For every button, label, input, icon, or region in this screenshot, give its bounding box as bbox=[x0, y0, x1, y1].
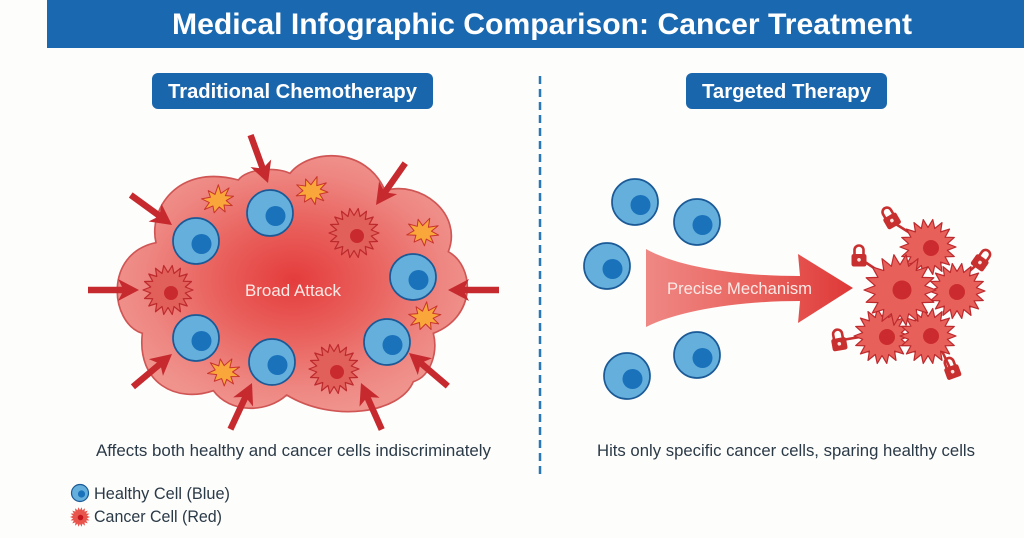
caption: chemotherapy: Affects both healthy and cancer cells indiscriminately bbox=[96, 442, 492, 460]
lock connectors bbox=[842, 221, 980, 368]
heading: Targeted Therapy bbox=[686, 73, 887, 109]
legend icon: cancer cell bbox=[70, 507, 90, 527]
legend icon: healthy cell bbox=[72, 484, 88, 502]
legend label: healthy: Healthy Cell (Blue) bbox=[94, 485, 230, 503]
padlocks on cancer cells bbox=[829, 204, 994, 381]
heading: Targeted Therapy: Targeted Therapy bbox=[702, 81, 872, 103]
caption: targeted therapy: Hits only specific cancer cells, sparing healthy cells bbox=[597, 442, 975, 460]
heading: Traditional Chemotherapy: Traditional Chemotherapy bbox=[168, 81, 418, 103]
damage bursts bbox=[200, 174, 442, 390]
arrow: precise mechanism bbox=[646, 249, 853, 327]
panel: chemotherapy broad attack bbox=[88, 131, 499, 434]
attack arrows bbox=[88, 131, 499, 434]
spared healthy cells bbox=[584, 179, 720, 399]
targeted cancer cell cluster bbox=[854, 220, 985, 363]
heading: Traditional Chemotherapy bbox=[152, 73, 433, 109]
legend bbox=[70, 484, 230, 527]
arrow: precise mechanism: Precise Mechanism bbox=[667, 279, 812, 298]
panel: targeted therapy bbox=[584, 179, 994, 399]
title: Medical Infographic Comparison: Cancer Treatment bbox=[172, 8, 912, 41]
cancer cells under attack bbox=[143, 208, 379, 394]
label: Broad Attack: Broad Attack bbox=[245, 281, 342, 300]
healthy cells under attack bbox=[173, 190, 436, 385]
legend label: cancer: Cancer Cell (Red) bbox=[94, 508, 222, 526]
cloud of affected tissue bbox=[117, 156, 467, 412]
header bar with title bbox=[47, 0, 1024, 48]
